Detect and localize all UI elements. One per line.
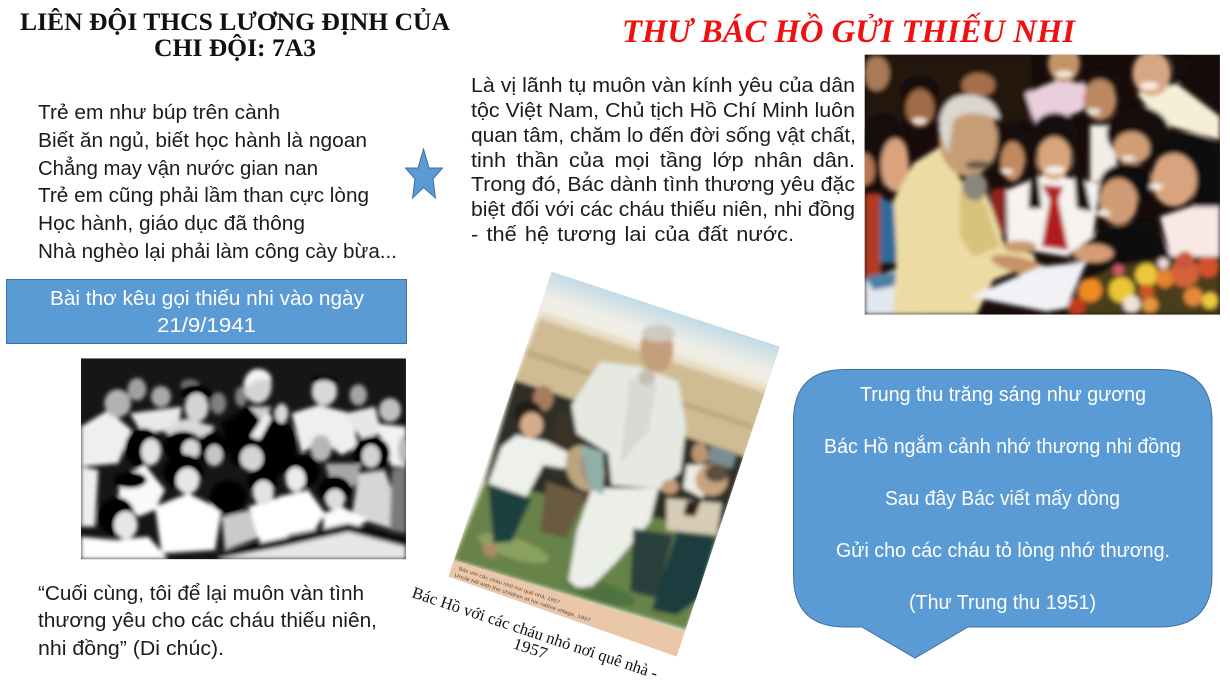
Ho Chi Minh body <box>893 147 1037 315</box>
grass <box>453 482 720 630</box>
paper <box>970 262 1087 312</box>
callout: mid-autumn letter poem: Gửi cho các cháu tỏ lòng nhớ thương. <box>836 540 1170 562</box>
back row <box>81 410 132 467</box>
front row <box>155 493 222 553</box>
text block: testament quotation: nhi đồng” (Di chúc). <box>38 638 224 660</box>
icon: blue star <box>406 149 442 198</box>
center girl <box>1031 113 1079 161</box>
text block: blue banner: Bài thơ kêu gọi thiếu nhi vào ngày <box>50 288 364 310</box>
right child <box>630 528 673 598</box>
photo: black and white, Uncle Ho with children <box>81 358 409 559</box>
center group clothes <box>1007 173 1100 257</box>
text block: testament quotation: thương yêu cho các cháu thiếu niên, <box>38 610 377 632</box>
table <box>218 532 406 559</box>
girl left of center <box>989 123 1031 173</box>
text block: testament quotation: “Cuối cùng, tôi để lại muôn vàn tình <box>38 583 364 605</box>
photo: Uncle Ho walking with children in hometown: Uncle Hồ with the children at his native village, 1957 <box>453 572 592 624</box>
left girl <box>865 193 881 280</box>
man in white <box>568 488 658 587</box>
text block: poem: Chẳng may vận nước gian nan <box>38 156 318 180</box>
right adults <box>292 405 358 455</box>
callout: mid-autumn letter poem: Sau đây Bác viết mấy dòng <box>885 488 1120 510</box>
text block: poem: Trẻ em như búp trên cành <box>38 102 280 124</box>
text block: poem: Học hành, giáo dục đã thông <box>38 213 305 235</box>
title: school and class <box>20 8 450 62</box>
Ho head <box>939 100 998 177</box>
callout: mid-autumn letter poem: Trung thu trăng sáng như gương <box>860 384 1146 406</box>
title: school and class: CHI ĐỘI: 7A3 <box>154 34 316 62</box>
caption: rotated photo caption: Bác Hồ với các cháu nhỏ nơi quê nhà - <box>410 583 660 683</box>
text block: poem: Nhà nghèo lại phải làm công cày bừa... <box>38 241 397 263</box>
text block: introduction paragraph: - thế hệ tương lai của đất nước. <box>471 224 794 246</box>
callout: mid-autumn letter poem <box>794 370 1212 658</box>
thatch wall <box>515 312 772 457</box>
text block: poem: Trẻ em cũng phải lầm than cực lòng <box>38 185 369 207</box>
text block: introduction paragraph: tộc Việt Nam, Chủ tịch Hồ Chí Minh luôn <box>471 100 855 122</box>
back row <box>864 56 889 91</box>
flowers <box>1067 257 1220 315</box>
title: letter from Uncle Ho: THƯ BÁC HỒ GỬI THIẾU NHI <box>622 11 1076 50</box>
callout: mid-autumn letter poem: Bác Hồ ngắm cảnh nhớ thương nhi đồng <box>824 435 1181 458</box>
text block: introduction paragraph: Là vị lãnh tụ muôn vàn kính yêu của dân <box>471 75 855 97</box>
left child <box>488 435 570 497</box>
photo: Uncle Ho walking with children in hometown: Bác với các cháu nhỏ nơi quê nhà, 1957 <box>458 565 561 606</box>
dark background <box>485 380 745 532</box>
text block: poem: Biết ăn ngủ, biết học hành là ngoan <box>38 130 367 152</box>
caption strip <box>448 560 685 657</box>
right girls <box>1107 107 1170 160</box>
photo: Uncle Ho walking with children in hometown <box>448 272 780 657</box>
text block: blue banner: 21/9/1941 <box>157 315 256 337</box>
caption: rotated photo caption: 1957 <box>511 634 550 663</box>
title: school and class: LIÊN ĐỘI THCS LƯƠNG ĐỊNH CỦA <box>20 8 450 36</box>
middle row <box>125 428 162 468</box>
hat <box>563 442 608 494</box>
text block: introduction paragraph <box>471 75 856 246</box>
text block: introduction paragraph: Trong đó, Bác dành tình thương yêu đặc <box>471 174 855 196</box>
callout: mid-autumn letter poem: (Thư Trung thu 1951) <box>909 592 1096 614</box>
text block: introduction paragraph: tinh thần của mọi tầng lớp nhân dân. <box>471 150 855 172</box>
background people <box>533 386 553 411</box>
photo: Uncle Ho with smiling pioneers <box>855 44 1222 315</box>
text block: introduction paragraph: quan tâm, chăm lo đến đời sống vật chất, <box>471 125 856 147</box>
text block: testament quotation <box>38 583 377 660</box>
text block: introduction paragraph: biệt đối với các cháu thiếu niên, nhi đồng <box>471 199 855 221</box>
text block: blue banner <box>6 280 406 344</box>
text block: poem <box>38 102 397 263</box>
Uncle Ho <box>222 407 295 480</box>
